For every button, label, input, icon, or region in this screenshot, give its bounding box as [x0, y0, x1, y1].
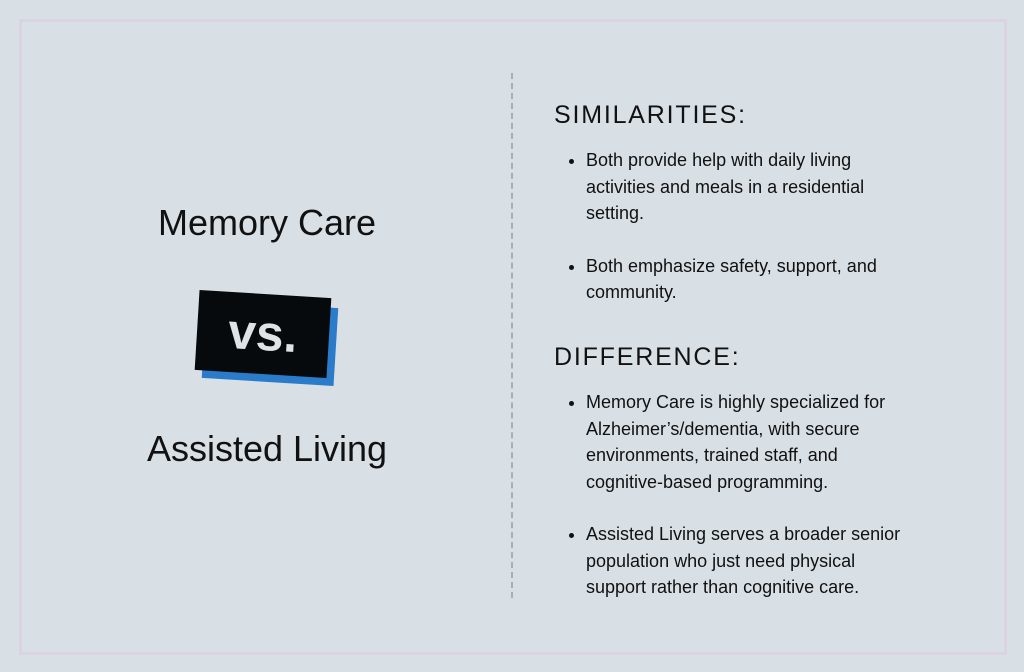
list: similarities: community.	[586, 282, 677, 302]
list: similarities: activities and meals in a residential	[586, 176, 864, 196]
list: difference: Alzheimer’s/dementia, with secure	[586, 418, 859, 438]
list: similarities: Both emphasize safety, support, and	[586, 256, 877, 276]
list: difference: cognitive-based programming.	[586, 472, 828, 492]
list: similarities	[569, 150, 877, 302]
list: similarities: setting.	[586, 203, 644, 223]
vs badge	[194, 290, 338, 386]
list: difference: population who just need physical	[586, 550, 855, 570]
title: Memory Care: Memory Care	[158, 202, 376, 243]
divider	[511, 73, 513, 598]
list: difference: Memory Care is highly specialized for	[586, 392, 885, 412]
list: difference: environments, trained staff, and	[586, 445, 838, 465]
list: difference: support rather than cognitive care.	[586, 577, 859, 597]
list: difference	[569, 392, 900, 597]
heading: difference: DIFFERENCE:	[554, 343, 740, 371]
list: difference: Assisted Living serves a broader senior	[586, 524, 900, 544]
title: Assisted Living: Assisted Living	[147, 428, 387, 469]
list: similarities: Both provide help with daily living	[586, 150, 851, 170]
vs badge: vs.	[227, 303, 299, 363]
heading: similarities: SIMILARITIES:	[554, 101, 747, 129]
